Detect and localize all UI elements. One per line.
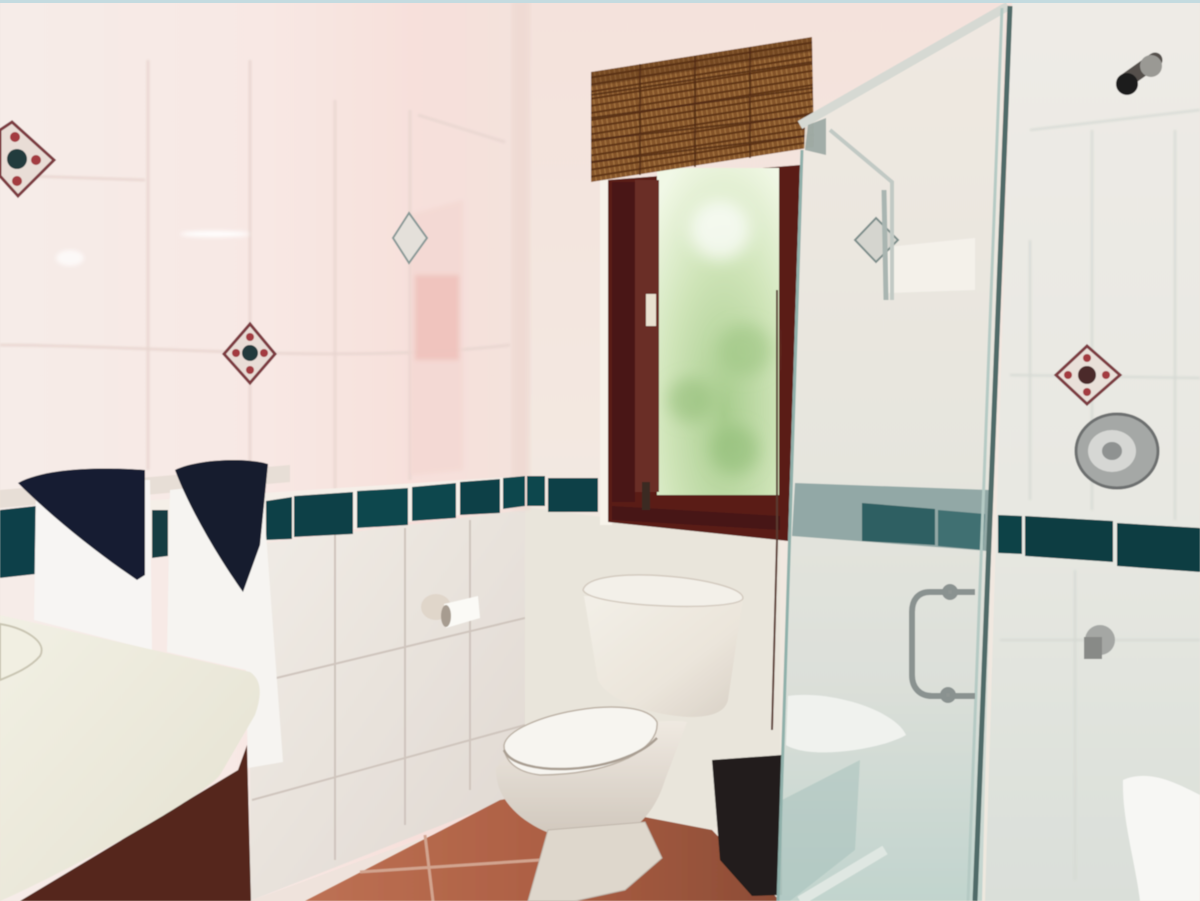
glass: reflected tile ornament — [855, 218, 898, 262]
tile: upper left — [0, 122, 54, 196]
floor — [305, 795, 780, 901]
window — [600, 165, 800, 541]
vanity cabinet — [20, 745, 251, 901]
dark tile band: shower wall — [998, 515, 1200, 572]
glass: reflected toilet lid — [786, 695, 906, 752]
back wall — [520, 0, 1020, 901]
lower left tiles — [250, 510, 525, 901]
dark tile band: back wall — [527, 476, 598, 512]
tile seams on upper left wall — [0, 60, 510, 490]
glass: left edge — [778, 150, 802, 901]
shower head — [1116, 55, 1162, 95]
shower door handle — [912, 587, 975, 700]
waste bin — [712, 755, 782, 896]
tile: reflected — [393, 213, 427, 263]
wall corner shade — [512, 0, 530, 510]
vanity countertop — [0, 615, 260, 901]
glass: reflected window square — [888, 238, 975, 293]
toilet: pedestal — [528, 822, 662, 901]
left wall — [0, 0, 525, 901]
wall reflection — [56, 200, 463, 475]
shower spout — [1084, 625, 1115, 659]
towel: right navy — [175, 460, 268, 592]
glass: lower dark reflection — [778, 760, 860, 901]
towel: right white — [167, 480, 283, 768]
bamboo blind — [591, 37, 814, 182]
decorative tiles — [0, 122, 1120, 404]
dark tile band: left wall — [0, 476, 525, 578]
toilet: lid — [504, 707, 657, 775]
lower back wall — [525, 507, 780, 830]
toilet: bowl — [496, 721, 687, 842]
right shower wall — [985, 0, 1200, 901]
shower glass panel — [778, 6, 1010, 901]
glass: bottom track — [800, 850, 885, 901]
cord — [772, 290, 777, 730]
top edge strip — [0, 0, 1200, 3]
glass: right metal post — [975, 6, 1010, 901]
tile: shower — [1056, 346, 1120, 404]
towel: left white — [34, 480, 152, 650]
glass: hinge line — [884, 190, 886, 300]
towel in shower — [1123, 776, 1200, 901]
towel rail — [0, 465, 290, 508]
toilet — [496, 575, 743, 901]
toilet: tank — [584, 596, 743, 717]
towels — [0, 460, 290, 768]
glass: top pane edge — [800, 6, 1008, 125]
towel: left navy — [18, 468, 145, 580]
toilet paper holder — [421, 594, 480, 628]
tile seams on shower wall — [1000, 110, 1200, 880]
glass: reflected tile band — [792, 483, 990, 551]
shower valve — [1076, 414, 1158, 488]
tile: middle left — [224, 324, 275, 383]
